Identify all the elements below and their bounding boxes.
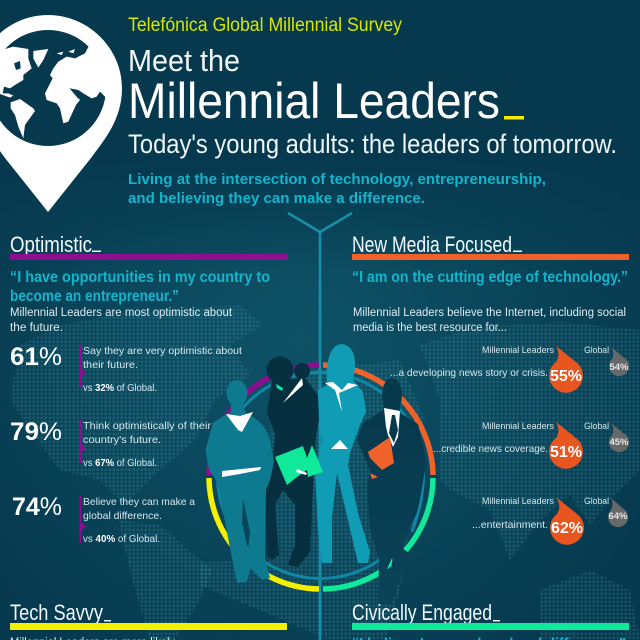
- panel: tech savvy: [10, 600, 287, 640]
- heading: optimistic: Optimistic: [10, 232, 92, 257]
- stat 79%: Think optimistically of their: [83, 420, 212, 432]
- figure: man in teal sweater: [206, 380, 274, 583]
- stat 61%: vs 32% of Global.: [83, 382, 157, 394]
- stat 79%: [10, 418, 212, 469]
- location pin with globe icon: [0, 15, 122, 212]
- stat 61%: 61%: [10, 343, 62, 371]
- row: entertainment: 64%: [608, 511, 628, 522]
- panel: optimistic: [10, 232, 288, 545]
- description: the future.: [10, 322, 63, 334]
- row: entertainment: ...entertainment.: [472, 519, 548, 531]
- row: credible news: ...credible news coverage.: [433, 443, 548, 455]
- intro text: Living at the intersection of technology, entrepreneurship,: [128, 171, 546, 188]
- main title: Millennial Leaders: [128, 73, 500, 129]
- panel: new media focused: [352, 232, 629, 545]
- heading: new media focused: New Media Focused: [352, 232, 512, 257]
- purple bar: [10, 254, 288, 260]
- title line 1: Meet the: [128, 43, 240, 78]
- heading: tech savvy: Tech Savvy: [10, 600, 103, 625]
- row: credible news: Millennial Leaders: [482, 421, 554, 432]
- stat 74%: global difference.: [83, 510, 162, 522]
- orange bar: [352, 254, 629, 260]
- segmented ring: [209, 365, 433, 589]
- description: media is the best resource for...: [353, 322, 507, 334]
- figure: woman in dark suit: [265, 356, 323, 567]
- row: entertainment: [472, 496, 628, 545]
- stat 74%: Believe they can make a: [83, 496, 195, 508]
- row: news story: Global: [584, 345, 609, 356]
- intro text: and believing they can make a difference.: [128, 190, 425, 207]
- yellow bar: [10, 623, 287, 630]
- stat 74%: 74%: [12, 493, 62, 521]
- row: entertainment: Global: [584, 496, 609, 507]
- row: entertainment: Millennial Leaders: [482, 496, 554, 507]
- description: [10, 307, 233, 334]
- figure: man in dark suit: [357, 378, 426, 604]
- stat 79%: 79%: [10, 418, 62, 446]
- description: Millennial Leaders are most optimistic about: [10, 307, 233, 319]
- row: credible news: 45%: [609, 437, 629, 448]
- intro text: [128, 171, 546, 207]
- stat 61%: Say they are very optimistic about: [83, 345, 242, 357]
- stat 61%: their future.: [83, 359, 138, 371]
- row: news story: [390, 345, 629, 393]
- background dotted world map: [10, 305, 640, 640]
- row: credible news: 51%: [550, 444, 582, 461]
- heading: civically engaged: Civically Engaged: [352, 600, 492, 625]
- row: credible news: Global: [584, 421, 609, 432]
- stat 74%: [12, 493, 195, 545]
- quote: “I have opportunities in my country to: [10, 269, 270, 286]
- description: [353, 307, 626, 334]
- row: news story: 55%: [550, 368, 582, 385]
- row: credible news: [433, 421, 629, 469]
- quote: [10, 269, 270, 305]
- stat 79%: country's future.: [83, 434, 161, 446]
- green bar: [352, 623, 629, 630]
- row: news story: 54%: [609, 362, 629, 373]
- group of four business figures: [206, 344, 426, 604]
- panel: civically engaged: [352, 600, 629, 640]
- row: news story: ...a developing news story or crisis.: [390, 367, 548, 379]
- stat 79%: vs 67% of Global.: [83, 457, 157, 469]
- row: news story: Millennial Leaders: [482, 345, 554, 356]
- center Y connector line: [288, 213, 352, 640]
- stat 74%: vs 40% of Global.: [83, 533, 160, 545]
- survey label: Telefónica Global Millennial Survey: [128, 15, 402, 36]
- row: entertainment: 62%: [551, 520, 583, 537]
- stat 61%: [10, 343, 242, 394]
- figure: woman in light teal suit: [315, 344, 370, 563]
- description: Millennial Leaders believe the Internet, including social: [353, 307, 626, 319]
- quote: become an entrepreneur.”: [10, 288, 179, 305]
